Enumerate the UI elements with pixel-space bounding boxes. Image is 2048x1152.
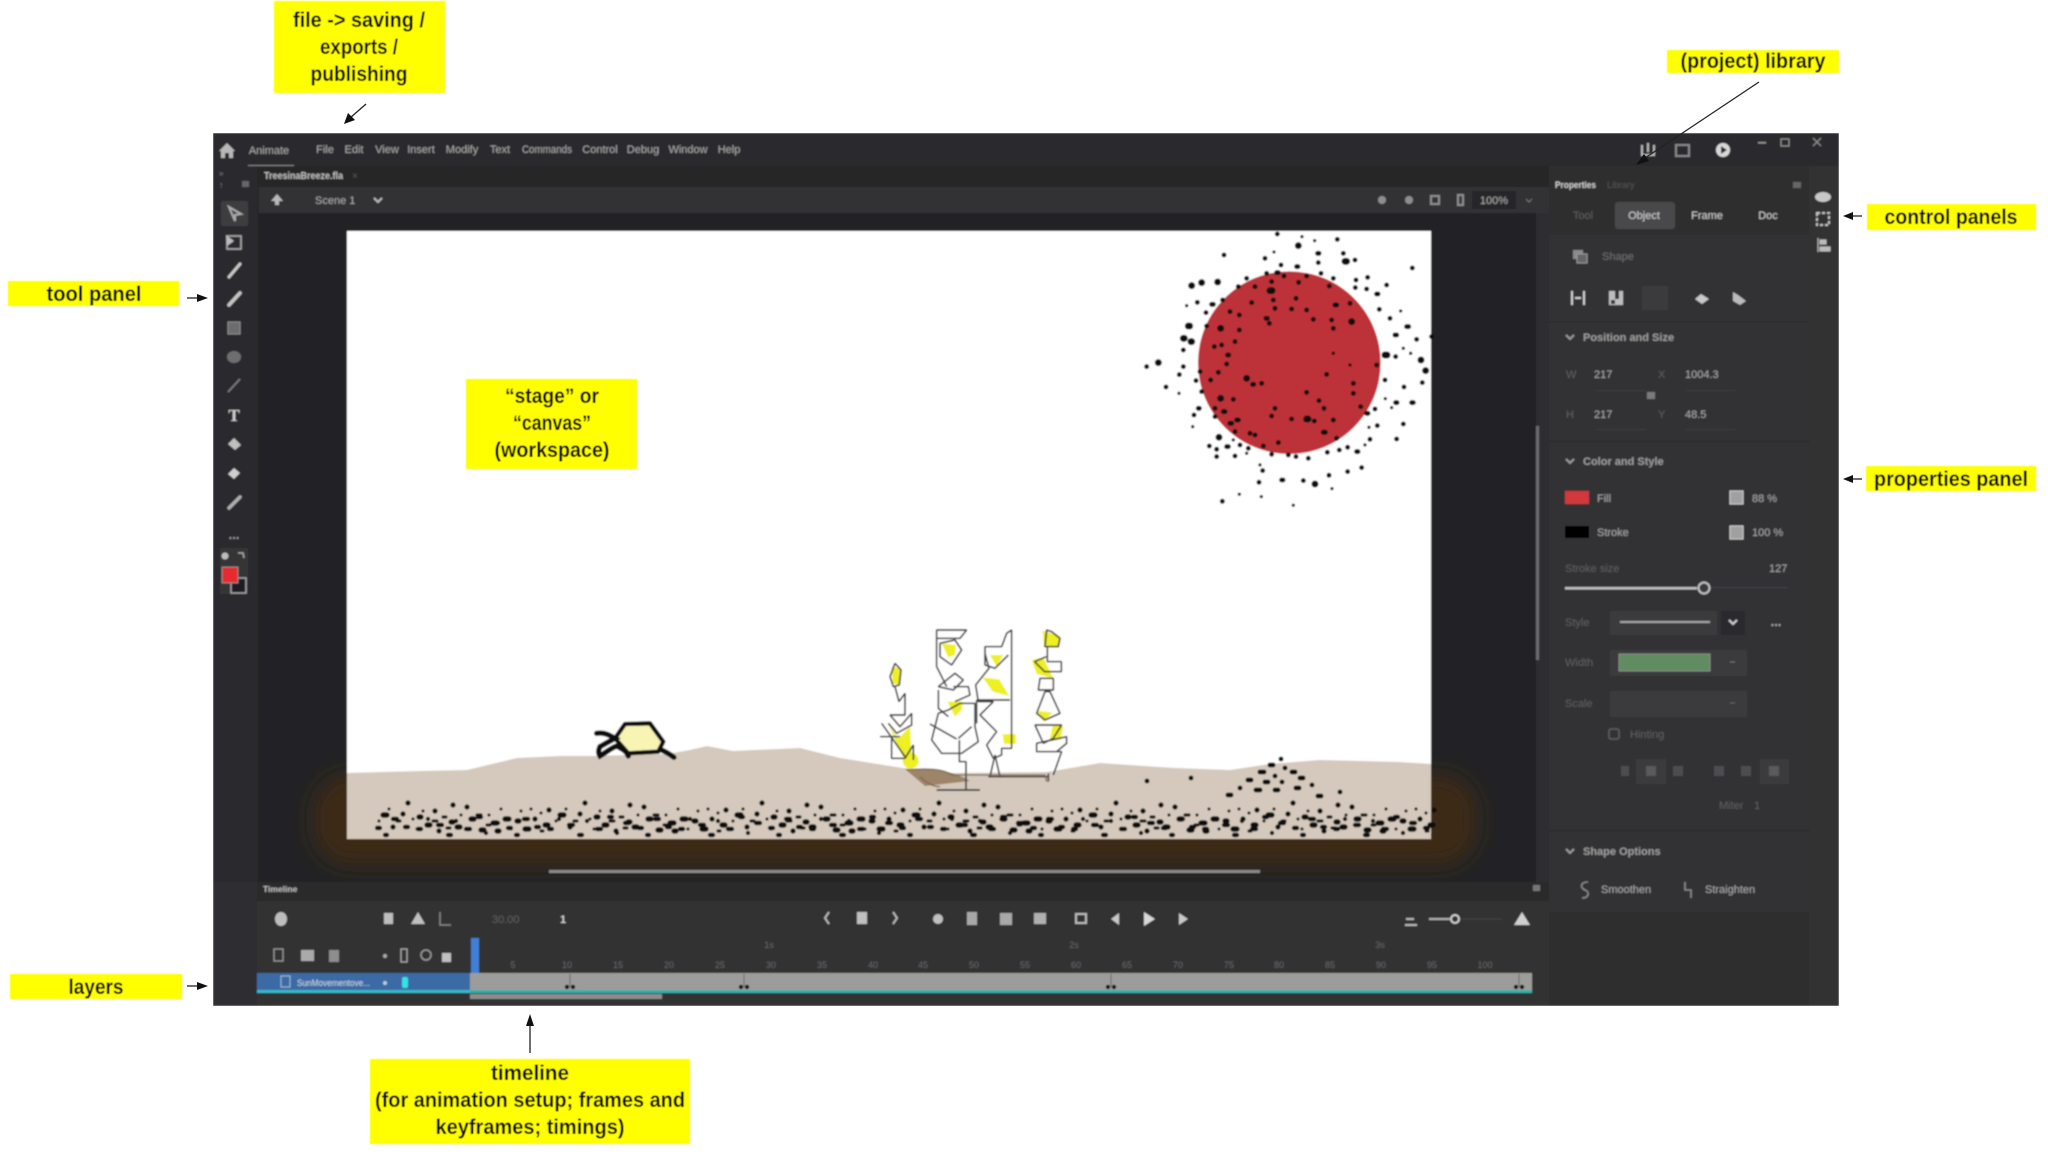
label: stage or canvas: (workspace) xyxy=(494,438,610,462)
colour and style xyxy=(1565,456,1789,812)
menu bar: Insert xyxy=(407,144,435,156)
label: layers: layers xyxy=(68,975,124,999)
hinting xyxy=(1609,729,1664,741)
ground xyxy=(347,746,1431,839)
frame ruler: 2s xyxy=(1069,940,1079,950)
shape row: Shape xyxy=(1602,251,1634,263)
menu bar: Animate xyxy=(249,145,289,157)
label: file saving exports publishing: publishing xyxy=(310,62,408,86)
frame ruler: 95 xyxy=(1427,960,1437,970)
timeline toolbar: 1 xyxy=(560,914,566,926)
colour and style: Color and Style xyxy=(1583,456,1664,468)
icon: rectangle xyxy=(228,322,240,334)
position and size: Position and Size xyxy=(1583,332,1674,344)
swatch: stroke colour xyxy=(231,578,246,593)
menu bar: Control xyxy=(582,144,618,156)
frame ruler: 90 xyxy=(1376,960,1386,970)
document tab bar xyxy=(257,166,1549,187)
style row: ... xyxy=(1771,614,1781,629)
frame ruler: 80 xyxy=(1274,960,1284,970)
document tab bar: × xyxy=(352,171,358,182)
stroke size slider xyxy=(1565,563,1787,594)
icon: eraser xyxy=(228,468,240,479)
label: stage or canvas: “stage” or xyxy=(505,384,600,408)
frame ruler xyxy=(510,940,1493,970)
shape options xyxy=(1566,846,1755,898)
shape row xyxy=(1573,250,1634,263)
arrow: tool panel xyxy=(187,294,208,302)
frame ruler: 75 xyxy=(1224,960,1234,970)
ground glow on pasteboard xyxy=(314,775,1476,865)
icon: brush xyxy=(229,264,240,277)
panel: tool panel: » xyxy=(219,169,224,178)
timeline toolbar: 30.00 xyxy=(492,914,520,926)
icon: oval xyxy=(227,351,241,363)
icon: selection xyxy=(229,207,241,221)
properties tabs: Tool xyxy=(1573,210,1593,222)
ground dots xyxy=(375,759,1440,839)
fill row: 88 % xyxy=(1752,493,1777,505)
panel: properties: Library xyxy=(1607,180,1635,190)
label: file saving exports publishing: exports / xyxy=(320,35,398,59)
icon: more tools: ... xyxy=(229,527,239,542)
menu bar: File xyxy=(316,144,334,156)
tortoise xyxy=(597,723,674,757)
playhead xyxy=(471,938,479,973)
label: timeline: timeline xyxy=(491,1061,569,1085)
icon: pencil xyxy=(229,293,240,305)
menu bar: Debug xyxy=(627,144,659,156)
scale row: Scale xyxy=(1565,698,1593,710)
smoothen button xyxy=(1582,882,1651,898)
stage xyxy=(347,231,1440,839)
layer row xyxy=(257,973,470,992)
menu bar xyxy=(213,133,1839,167)
arrow: project library xyxy=(1636,82,1759,165)
panel: properties: Properties xyxy=(1555,180,1596,190)
fill row: Fill xyxy=(1597,493,1611,505)
swatch: fill colour xyxy=(222,567,238,583)
miter: Miter xyxy=(1719,800,1744,812)
menu bar: Window xyxy=(668,144,708,156)
position and size: 217 xyxy=(1594,369,1612,381)
arrow: timeline xyxy=(526,1014,534,1053)
icon: paint bucket xyxy=(228,438,241,450)
arrow: properties panel xyxy=(1843,475,1862,483)
label: layers xyxy=(10,974,182,999)
scale row xyxy=(1565,691,1747,717)
frame ruler: 25 xyxy=(715,960,725,970)
icon: free transform xyxy=(226,235,241,249)
scrollbars xyxy=(549,426,1539,873)
frame ruler: 55 xyxy=(1020,960,1030,970)
panel: tool panel: ↑ xyxy=(219,180,224,190)
label: tool panel: tool panel xyxy=(46,282,142,306)
frame ruler: 70 xyxy=(1173,960,1183,970)
label: timeline: keyframes; timings) xyxy=(436,1115,624,1139)
position and size: 217 xyxy=(1594,409,1612,421)
position and size: H xyxy=(1566,409,1574,421)
arrow: control panels xyxy=(1843,212,1862,220)
position and size: Y xyxy=(1658,409,1666,421)
menu bar: Edit xyxy=(345,144,363,156)
icon: eyedropper xyxy=(229,497,240,508)
label: project library: (project) library xyxy=(1680,49,1826,73)
frame ruler: 15 xyxy=(613,960,623,970)
frame ruler: 35 xyxy=(817,960,827,970)
panel: properties xyxy=(1549,166,1809,1006)
scene bar: 100% xyxy=(1480,195,1508,207)
style row xyxy=(1565,611,1781,635)
position and size: X xyxy=(1658,369,1666,381)
frame ruler: 60 xyxy=(1071,960,1081,970)
frame ruler: 1s xyxy=(764,940,774,950)
keyframes xyxy=(565,974,1524,989)
stroke size slider: 127 xyxy=(1769,563,1787,575)
frame ruler: 50 xyxy=(969,960,979,970)
frame ruler: 3s xyxy=(1375,940,1385,950)
icon: home xyxy=(219,143,235,158)
pasteboard xyxy=(257,213,1536,882)
frame span xyxy=(257,973,1532,999)
straighten button: Straighten xyxy=(1705,884,1755,896)
sun xyxy=(1147,234,1432,505)
application window xyxy=(213,133,1839,1006)
label: stage or canvas: “canvas” xyxy=(513,411,591,435)
trees xyxy=(880,630,1067,790)
arrow: file menu xyxy=(344,104,366,124)
stroke size slider: Stroke size xyxy=(1565,563,1619,575)
layer controls xyxy=(274,949,451,962)
panel: timeline: Timeline xyxy=(263,884,298,894)
menu bar: Modify xyxy=(446,144,479,156)
frame ruler: 30 xyxy=(766,960,776,970)
scene bar xyxy=(257,187,1549,213)
scene bar: Scene 1 xyxy=(315,195,355,207)
arrow: layers xyxy=(187,982,208,990)
object icon row xyxy=(1572,286,1746,310)
position and size: 1004.3 xyxy=(1685,369,1719,381)
menu bar: Commands xyxy=(522,144,572,156)
hinting: Hinting xyxy=(1630,729,1664,741)
width row xyxy=(1565,650,1747,676)
panel: collapsed control panels strip xyxy=(1809,166,1839,1006)
label: tool panel xyxy=(8,281,179,306)
shape options: Shape Options xyxy=(1583,846,1661,858)
label: timeline: (for animation setup; frames and xyxy=(375,1088,685,1112)
icon: line xyxy=(228,379,240,392)
straighten button xyxy=(1685,882,1755,898)
width row: Width xyxy=(1565,657,1593,669)
properties tabs xyxy=(1573,202,1778,229)
frame ruler: 85 xyxy=(1325,960,1335,970)
label: properties panel: properties panel xyxy=(1874,467,2028,491)
icon: text tool: T xyxy=(228,406,240,425)
miter xyxy=(1719,800,1760,812)
miter: 1 xyxy=(1754,800,1760,812)
position and size xyxy=(1566,332,1736,430)
properties tabs: Object xyxy=(1628,210,1660,222)
properties tabs: Frame xyxy=(1691,210,1723,222)
menu bar: View xyxy=(375,144,399,156)
stroke row: 100 % xyxy=(1752,527,1783,539)
frame ruler: 45 xyxy=(918,960,928,970)
label: control panels: control panels xyxy=(1884,205,2018,229)
label: file saving exports publishing: file -> saving / xyxy=(293,8,425,32)
position and size: 48.5 xyxy=(1685,409,1706,421)
label: file saving exports publishing xyxy=(274,1,445,93)
frame ruler: 5 xyxy=(510,960,516,970)
timeline toolbar xyxy=(275,912,1530,926)
ground shadow under trees xyxy=(905,769,970,786)
label: timeline xyxy=(370,1059,690,1144)
frame ruler: 20 xyxy=(664,960,674,970)
frame ruler: 40 xyxy=(868,960,878,970)
fill row xyxy=(1565,491,1777,505)
panel: tool panel xyxy=(213,166,259,1006)
stroke row: Stroke xyxy=(1597,527,1629,539)
frame ruler: 10 xyxy=(562,960,572,970)
frame ruler: 65 xyxy=(1122,960,1132,970)
properties tabs: Doc xyxy=(1758,210,1778,222)
menu bar: Text xyxy=(490,144,510,156)
stroke row xyxy=(1565,526,1783,539)
layer row: SunMovementove... xyxy=(297,978,370,989)
frame ruler: 100 xyxy=(1477,960,1493,970)
position and size: W xyxy=(1566,369,1577,381)
label: stage or canvas xyxy=(466,379,637,469)
style row: Style xyxy=(1565,617,1589,629)
panel: timeline xyxy=(257,882,1549,1006)
document tab bar: TreesinaBreeze.fla xyxy=(264,171,343,182)
cap and join icons xyxy=(1621,759,1789,784)
menu bar: Help xyxy=(718,144,740,156)
smoothen button: Smoothen xyxy=(1601,884,1651,896)
